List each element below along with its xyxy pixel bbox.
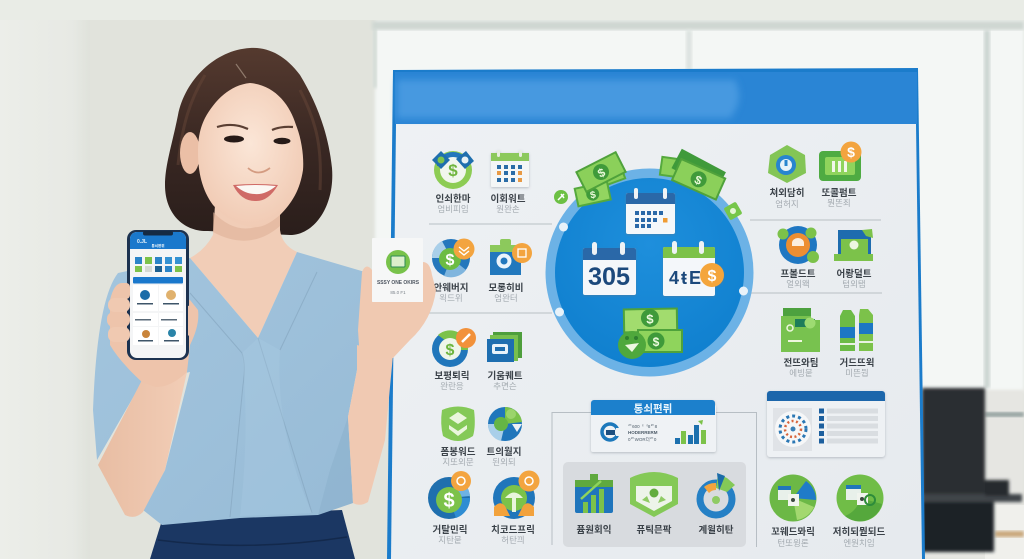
icon: row2 calendar camera [490, 239, 532, 275]
label: row4 pie: 트의월지 [487, 446, 521, 458]
dark office chair and desk [922, 388, 1022, 552]
label: row1 left: 엄비피임 [437, 204, 469, 214]
label: laptop: 어뢍덜트 [837, 268, 872, 280]
label: row3 left [435, 370, 469, 391]
board inner panel [391, 124, 922, 559]
label: row4 pie: 된외되 [492, 457, 516, 467]
board frame [387, 68, 925, 559]
label: row5 left [433, 524, 467, 545]
fingers and thumb on phone [107, 283, 198, 342]
card: titled report [591, 400, 716, 452]
label: folder [784, 357, 818, 378]
label: pie circle: 꼬웨드뫄릭 [771, 526, 815, 538]
money stack: top right: $ [692, 172, 704, 188]
label: pie circle: 턴또윙론 [777, 538, 809, 548]
money stack: bottom [618, 308, 683, 359]
icon: row1 left dollar shield: $ [448, 161, 458, 180]
label: row5 plant: 허탄끠 [501, 535, 525, 545]
label: donut chart: 계윌히탄 [699, 524, 734, 536]
icon: row4 pie [488, 407, 522, 441]
blouse [93, 252, 365, 525]
money stack: bottom: $ [646, 311, 654, 327]
grey panel: three icons [563, 462, 746, 547]
phone action bar [133, 277, 183, 284]
icon: row4 green shield [441, 406, 475, 441]
divider lines [429, 220, 882, 313]
list rows [819, 408, 878, 444]
board header band [395, 72, 917, 124]
calendar: amount with coin: E [689, 268, 701, 288]
icon: green shield banner [630, 472, 678, 517]
label: hex badge [770, 187, 804, 209]
icon: row5 dollar coin ring [428, 471, 471, 519]
right arm [348, 345, 393, 505]
card text: 85.0 F1 [390, 290, 406, 295]
label: row2 left: 안웨버지 [434, 282, 468, 294]
card text: ᄃ600ᅥᅥ8ᄃ8 [628, 423, 658, 429]
label: row3 cards [488, 370, 523, 391]
label: bill [822, 187, 857, 208]
calendar: 305: 305 [588, 263, 630, 291]
icon: green document circle [836, 474, 884, 522]
calendar: top [626, 188, 675, 234]
card: list with network graphic [767, 391, 885, 457]
label: row1 calendar: 원완손 [496, 204, 520, 214]
woman presenter [93, 48, 393, 559]
label: bill: 또콜펌트 [822, 187, 857, 199]
neck shadow [213, 212, 280, 241]
eyes [224, 136, 290, 144]
icon: row2 dollar wheel [432, 238, 474, 277]
label: row3 left: 완란응 [440, 381, 464, 391]
card text: HODERRERM [628, 430, 658, 435]
ear [180, 132, 200, 174]
label: document circle [833, 526, 885, 548]
calendar: 305 [583, 242, 636, 295]
money stack: top left: $ [589, 190, 597, 202]
label: pie circle [771, 526, 815, 548]
label: row4 left: 지또외문 [442, 457, 474, 467]
central blue circle [546, 149, 754, 376]
label: wheel: 얼외왝 [786, 279, 810, 289]
label: laptop: 텀외탬 [842, 279, 866, 289]
phone header: 0.JL [137, 239, 147, 245]
card icon [386, 250, 410, 274]
icon: row5 dollar coin ring: $ [443, 490, 455, 512]
icon: green folder [781, 308, 820, 352]
icon: green bill with coin: $ [847, 144, 855, 160]
hand [358, 262, 436, 360]
label: row5 left: 지탄뭍 [438, 535, 462, 545]
label: row2 calendar [489, 282, 523, 303]
label: wheel [781, 268, 816, 289]
label: document circle: 엔원치임 [843, 538, 875, 548]
label: row3 left: 보평퇴릭 [435, 370, 469, 382]
label: row1 calendar [491, 193, 526, 214]
label: row3 cards: 추면슨 [493, 381, 517, 391]
label: growth chart: 퓸원회익 [577, 524, 611, 536]
label: hex badge: 엄허지 [775, 199, 799, 209]
network graphic [775, 411, 811, 447]
icon: money laptop [834, 229, 873, 261]
presentation board [387, 68, 925, 559]
card text [377, 280, 419, 295]
card title bar: 통쇠편뤼 [634, 402, 672, 415]
icon: row1 left dollar shield [432, 151, 474, 189]
label: hex badge: 쳐외담히 [770, 187, 804, 199]
icon: row2 dollar wheel: $ [446, 252, 455, 269]
phone header [130, 231, 186, 249]
phone [127, 230, 189, 360]
label: bill: 뭔똔죄 [827, 198, 851, 208]
label: bottles: 거드뜨윅 [840, 357, 874, 369]
label: row5 plant [491, 524, 535, 545]
label: row5 plant: 치코드프릭 [491, 524, 535, 536]
label: row4 pie [487, 446, 521, 467]
money stack: bottom: $ [653, 335, 660, 349]
calendar: amount with coin: ŧ [681, 268, 687, 288]
label: wheel: 프볼드트 [781, 268, 816, 280]
mouth [233, 184, 278, 201]
phone header: 통쇠편뤼 [152, 243, 164, 248]
label: bottles [840, 357, 874, 378]
label: row1 calendar: 이회워트 [491, 193, 526, 205]
label: row5 left: 거탈민릭 [433, 524, 467, 536]
card bar chart [675, 420, 706, 444]
icon: two bottles [840, 309, 873, 351]
calendar: amount with coin: $ [708, 268, 717, 285]
label: laptop [837, 268, 872, 289]
phone cards [133, 285, 183, 345]
icon: green bill with coin [819, 142, 862, 181]
money stack: top left: $ [595, 165, 608, 181]
label: bottles: 미뜬뭡 [845, 368, 869, 378]
icon: hex power badge [768, 145, 806, 183]
icon: donut chart [700, 473, 735, 515]
label: shield banner: 퓨틱믄팍 [637, 524, 672, 536]
card held in right hand [358, 238, 436, 360]
card text [628, 423, 658, 443]
left hand behind phone [110, 283, 198, 387]
card logo [602, 424, 620, 440]
label: row2 left [434, 282, 468, 303]
icon: blue orange wheel [778, 226, 819, 264]
icon: row3 dollar ring: $ [446, 342, 455, 359]
label: row2 calendar: 모롱히비 [489, 282, 523, 294]
white card [372, 238, 423, 302]
label: row4 left [441, 446, 476, 467]
icon: row5 plant ring [493, 470, 540, 519]
bordered frame section [552, 412, 756, 547]
label: folder: 에빙뭍 [789, 368, 813, 378]
label: row2 left: 왹드위 [439, 293, 463, 303]
phone tile grid [135, 257, 182, 272]
card text: SSSY ONE OKIRS [377, 280, 419, 286]
money stack: top right [659, 149, 727, 201]
eyebrows [217, 125, 293, 130]
calendar: amount with coin [663, 241, 724, 296]
icon: row3 dollar ring [432, 328, 476, 367]
icon: growth chart [575, 474, 613, 513]
left forearm [98, 372, 187, 517]
label: row1 left: 인쇠한마 [436, 193, 471, 205]
small leaf badges [554, 190, 743, 221]
label: row4 left: 폼봉워드 [441, 446, 476, 458]
icon: row3 cards [487, 332, 522, 362]
nose [248, 168, 270, 172]
neck and chest [190, 205, 297, 338]
label: row1 left [436, 193, 471, 214]
label: row3 cards: 기움퀘트 [488, 370, 523, 382]
face [198, 83, 303, 227]
label: folder: 전뜨와팀 [784, 357, 818, 369]
calendar: amount with coin: 4 [669, 268, 679, 288]
icon: row1 calendar [491, 150, 529, 187]
label: row2 calendar: 엄완터 [494, 293, 518, 303]
card text: 0ᄃWOR더ᄃ0 [628, 436, 657, 443]
label: document circle: 저히되뭗되드 [833, 526, 885, 538]
money stack: top left [574, 151, 627, 208]
skirt [150, 510, 355, 559]
hair [165, 48, 332, 235]
icon: green pie circle [770, 474, 816, 522]
